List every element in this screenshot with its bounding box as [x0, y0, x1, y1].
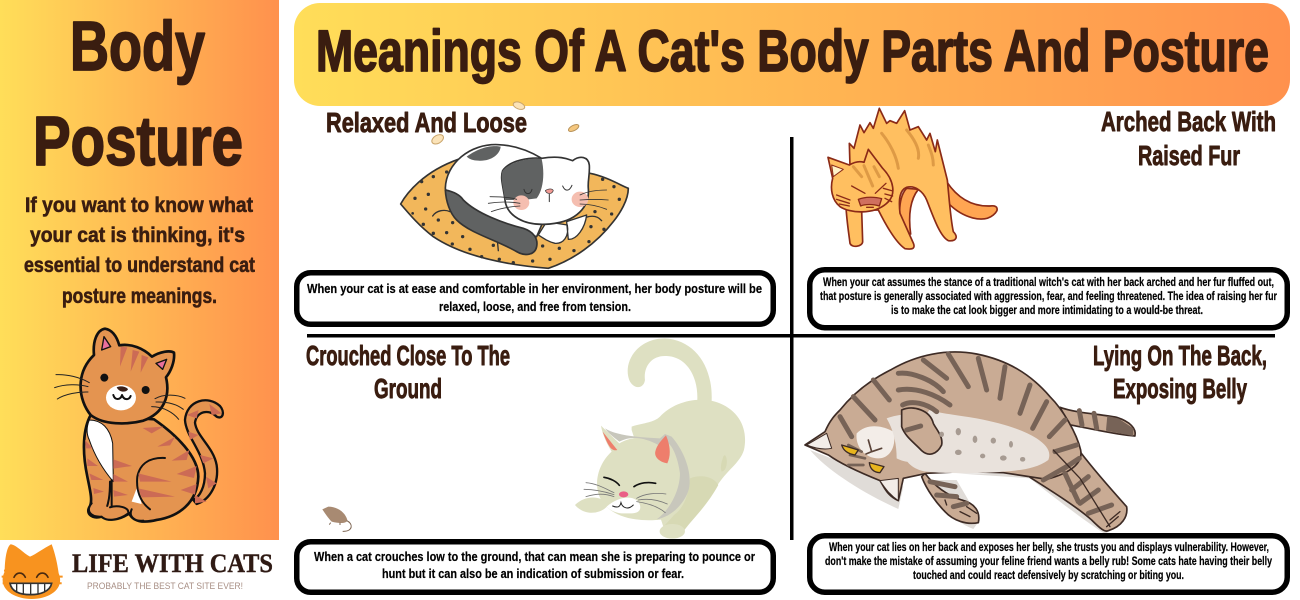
description box	[810, 270, 1287, 328]
sidebar intro text	[24, 194, 255, 308]
description box: relaxed, loose, and free from tension.	[439, 300, 631, 314]
panel: left sidebar body posture	[0, 0, 279, 540]
heading: crouched	[306, 340, 510, 404]
description box: is to make the cat look bigger and more intimidating to a would-be threat.	[891, 305, 1203, 317]
heading: relaxed and loose: Relaxed And Loose	[326, 107, 527, 138]
panel: crouched close to the ground	[297, 338, 773, 592]
illustration: mouse	[322, 507, 351, 531]
description box: When a cat crouches low to the ground, that can mean she is preparing to pounce or	[314, 550, 755, 564]
illustration: cat sleeping on cushion	[401, 100, 628, 268]
sidebar intro text: essential to understand cat	[24, 254, 255, 277]
logo tagline: PROBABLY THE BEST CAT SITE EVER!	[87, 581, 243, 592]
description box: When your cat is at ease and comfortable in her environment, her body posture will be	[307, 282, 762, 296]
sidebar intro text: posture meanings.	[62, 285, 217, 308]
sidebar intro text: If you want to know what	[25, 194, 253, 217]
sidebar heading: Body	[70, 7, 205, 85]
heading: lying on the back	[1093, 340, 1267, 404]
illustration: crouching cream cat	[575, 338, 745, 539]
logo wordmark: LIFE WITH CATS	[72, 549, 273, 578]
icon: sitting orange tabby cat	[55, 329, 223, 522]
heading: crouched: Crouched Close To The	[306, 340, 510, 371]
title banner	[294, 3, 1290, 106]
illustration: tabby cat lying on its back	[805, 352, 1135, 534]
description box: touched and could react defensively by scratching or biting you.	[913, 570, 1184, 582]
description box	[297, 542, 773, 592]
description box	[297, 273, 773, 324]
heading: crouched: Ground	[374, 373, 442, 404]
sidebar heading	[33, 7, 243, 180]
illustration: arched angry cat	[828, 108, 997, 249]
icon: grinning orange cat face	[2, 544, 63, 599]
description box	[810, 536, 1287, 592]
description box: hunt but it can also be an indication of submission or fear.	[382, 567, 684, 581]
panel: relaxed and loose	[297, 100, 773, 324]
logo: life with cats	[2, 544, 273, 599]
panel: arched back with raised fur	[810, 106, 1287, 328]
sidebar intro text: your cat is thinking, it's	[30, 224, 245, 247]
heading: arched back	[1101, 106, 1276, 171]
sidebar heading: Posture	[33, 102, 243, 180]
panel: lying on the back exposing belly	[805, 340, 1287, 592]
heading: arched back: Raised Fur	[1138, 140, 1240, 171]
